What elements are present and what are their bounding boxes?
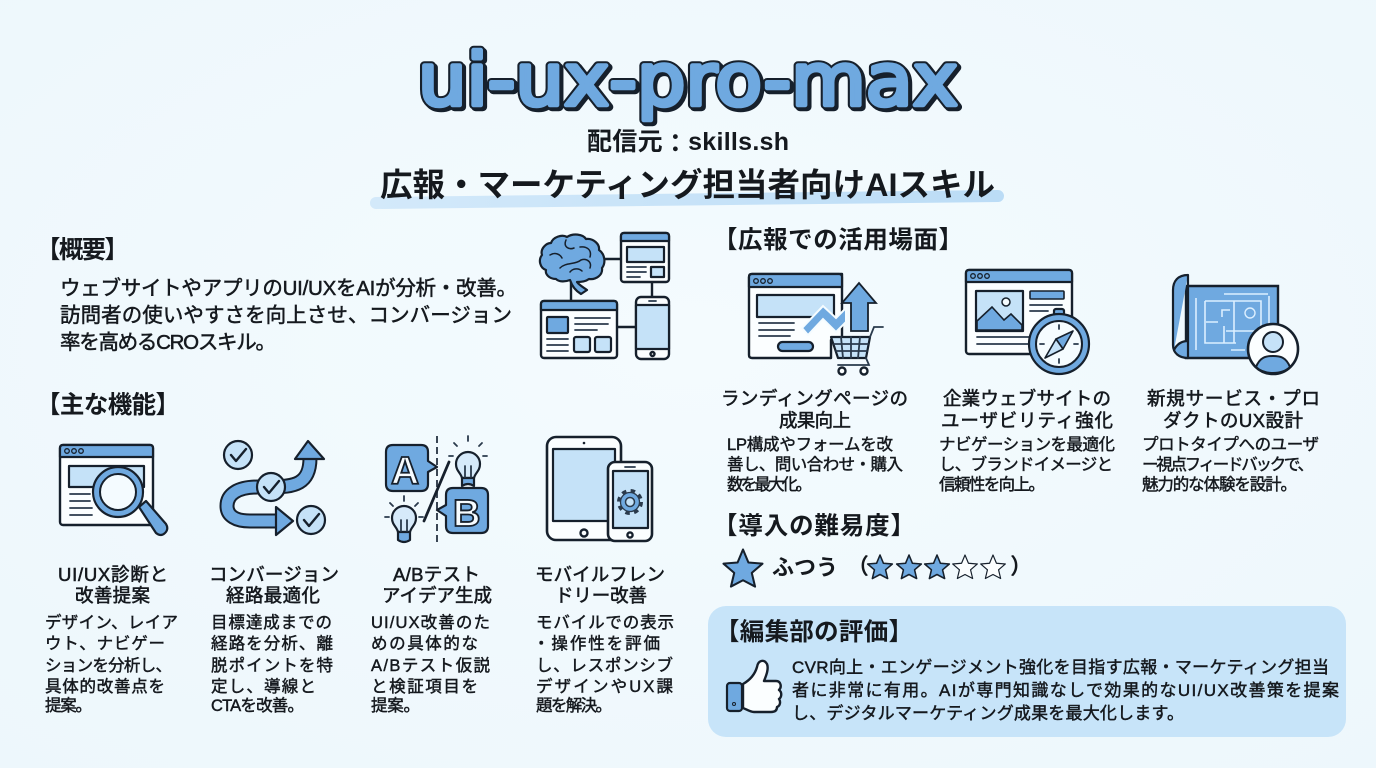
feature description: 具体的改善点を [45,677,165,696]
feature description: デザイン、レイア [45,612,178,632]
title: ui-ux-pro-max [418,38,958,122]
feature description: デザインやUX課 [536,676,674,696]
icon: A/B bubbles and bulbs: B [453,493,480,535]
review text: 者に非常に有用。AIが専門知識なしで効果的なUI/UX改善策を提案 [792,681,1339,700]
feature description: と検証項目を [371,677,478,696]
feature title [209,564,339,606]
source line: 配信元 [587,128,663,156]
feature description [45,612,178,715]
feature description: UI/UX改善のた [371,613,490,632]
feature description: 経路を分析、離 [211,634,333,653]
feature title: UI/UX診断と [58,564,168,585]
use case title: 成果向上 [779,410,851,431]
feature title: 改善提案 [75,585,150,606]
feature title: アイデア生成 [382,585,492,606]
use case description: 数を最大化。 [727,475,812,494]
feature description [211,613,333,715]
feature title: ドリー改善 [555,585,647,606]
panel: feature mobile friendly [533,437,674,715]
feature description: 提案。 [371,696,420,715]
icon: large star [724,550,762,587]
use case description: 魅力的な体験を設計。 [1142,475,1297,494]
heading: overview: 【概要】 [36,236,129,264]
feature description [533,613,674,715]
rating stars [868,555,1005,579]
overview text: 訪問者の使いやすさを向上させ、コンバージョン [60,304,512,327]
use case title [941,388,1113,431]
feature title [58,564,168,606]
review text: し、デジタルマーケティング成果を最大化します。 [792,703,1184,723]
title: ui-ux-pro-max [418,38,958,122]
icon: window and magnifier [60,445,167,535]
feature description: 脱ポイントを特 [211,656,333,675]
icon: A/B bubbles and bulbs [385,436,488,543]
title: ui-ux-pro-max [420,40,960,124]
feature description: ウト、ナビゲー [45,634,165,653]
feature description: A/Bテスト仮説 [371,656,490,675]
feature title [535,564,665,606]
use case title: ユーザビリティ強化 [941,410,1113,431]
feature title [382,564,492,606]
panel: use case new service [1142,275,1320,494]
icon: tablet and phone [547,437,652,541]
use case title: 新規サービス・プロ [1147,388,1320,409]
use case title: 企業ウェブサイトの [943,388,1111,409]
use case title: ランディングページの [721,388,908,409]
use case description: 信頼性を向上。 [939,475,1045,494]
overview text: ウェブサイトやアプリのUI/UXをAIが分析・改善。 [60,276,517,300]
rating opening bracket: （ [847,554,869,579]
source line: skills.sh [688,128,789,156]
panel: use case landing page [721,274,908,494]
panel: overview [36,236,517,354]
feature title: 経路最適化 [226,585,320,606]
icon: website and compass [966,270,1089,374]
feature description: めの具体的な [371,634,478,653]
source line: ： [663,130,688,158]
feature description: 提案。 [45,696,92,715]
feature description [371,613,490,715]
icon: landing page, chart and cart [749,274,883,374]
heading: editorial review: 【編集部の評価】 [715,618,913,646]
review text [792,658,1339,723]
feature description: 目標達成までの [211,613,332,632]
overview text: 率を高めるCROスキル。 [60,331,276,354]
use case description [727,435,903,494]
icon: brain and devices network [540,233,669,359]
icon: route with checkpoints [224,441,325,535]
use case description: 善し、問い合わせ・購入 [727,455,903,474]
heading: difficulty: 【導入の難易度】 [713,512,915,540]
subtitle with highlight: 広報・マーケティング担当者向けAIスキル [380,167,995,203]
heading: use cases: 【広報での活用場面】 [713,226,963,254]
feature title: A/Bテスト [393,564,480,585]
panel: editorial review [708,606,1346,737]
feature description: ・操作性を評価 [533,634,660,653]
feature description: し、レスポンシブ [536,655,673,675]
panel: feature UI/UX diagnosis [45,445,178,715]
feature description: CTAを改善。 [211,696,304,715]
use case title [721,388,908,431]
use case description [939,435,1115,494]
overview text [60,276,517,354]
heading: main features: 【主な機能】 [36,391,180,419]
feature title: コンバージョン [209,564,339,585]
rating closing bracket: ） [1010,554,1032,579]
use case description: ー視点フィードバックで、 [1142,455,1314,474]
feature description: ションを分析し、 [45,656,172,675]
panel: feature conversion path [209,441,339,715]
icon: blueprint and user [1173,275,1298,374]
icon: A/B bubbles and bulbs: A [391,450,419,493]
use case description: し、ブランドイメージと [939,454,1113,474]
review text: CVR向上・エンゲージメント強化を目指す広報・マーケティング担当 [792,658,1329,677]
use case description [1142,435,1319,494]
panel: use case corporate website [939,270,1115,494]
use case description: ナビゲーションを最適化 [939,435,1115,454]
use case title [1147,388,1320,431]
feature title: モバイルフレン [535,564,665,585]
difficulty rating [724,550,1032,587]
rating label: ふつう [772,555,838,580]
icon: thumbs up [727,661,781,712]
feature description: 題を解決。 [536,696,612,715]
panel: feature A/B test [371,436,492,715]
feature description: モバイルでの表示 [536,613,674,632]
use case title: ダクトのUX設計 [1163,410,1303,431]
use case description: プロトタイプへのユーザ [1142,435,1319,454]
use case description: LP構成やフォームを改 [727,435,894,454]
feature description: 定し、導線と [211,677,316,696]
